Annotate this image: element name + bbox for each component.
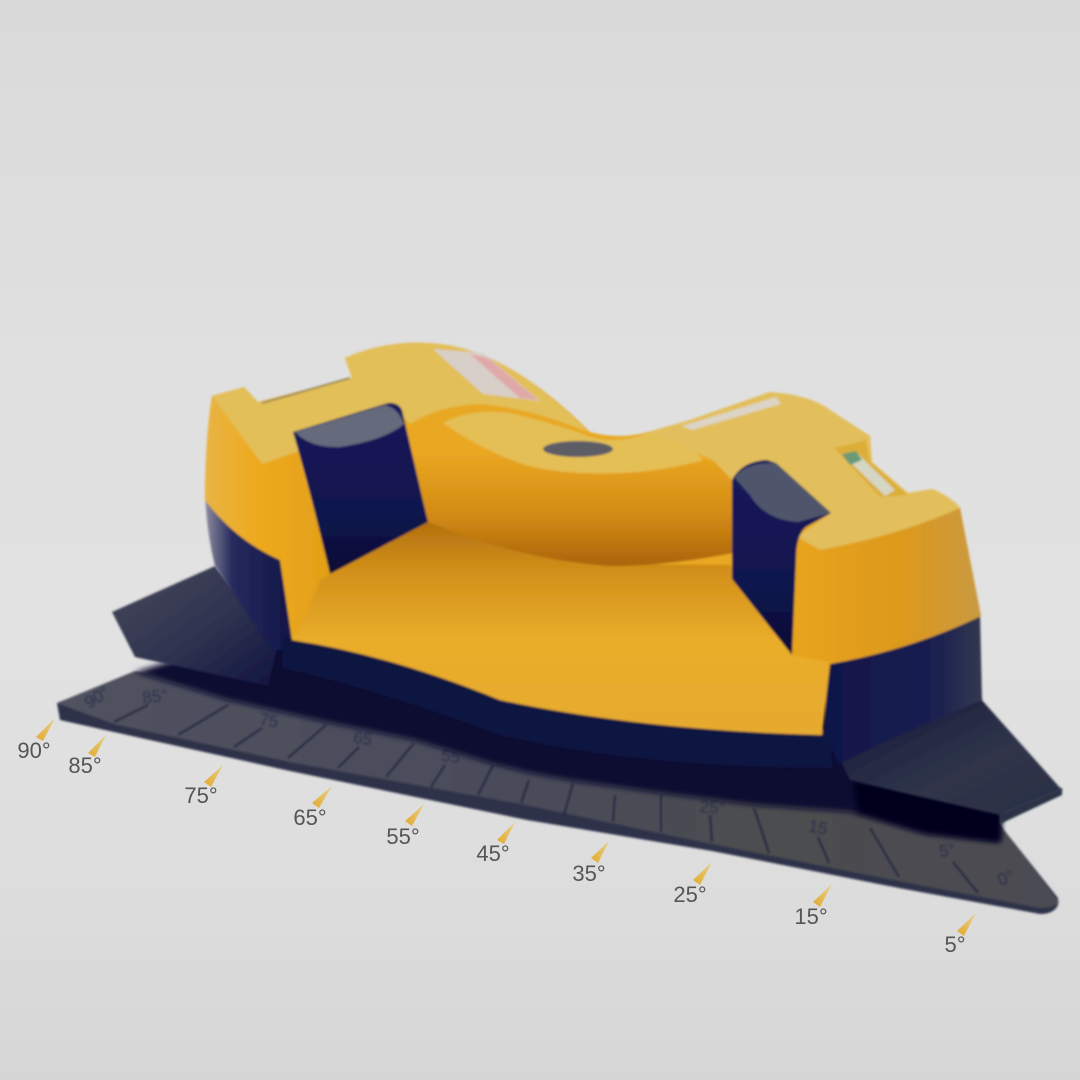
ruler tick marks xyxy=(114,705,978,893)
degree labels: 55° xyxy=(386,824,420,849)
ruler printed degree numbers xyxy=(81,682,1017,890)
right top surface xyxy=(648,392,960,550)
ruler side edge xyxy=(57,672,1058,914)
ruler shadow from body xyxy=(135,640,1002,842)
degree labels: 25° xyxy=(673,882,707,907)
ruler printed degree numbers: 15 xyxy=(807,817,829,839)
top surface left xyxy=(212,343,588,464)
degree labels: 5° xyxy=(944,932,966,957)
sight hole xyxy=(543,441,613,457)
level vial xyxy=(834,440,908,497)
degree labels: 45° xyxy=(476,841,510,866)
left navy pad xyxy=(293,403,428,574)
right navy housing xyxy=(826,614,982,764)
right foot xyxy=(836,698,1062,815)
black shadow below right foot xyxy=(852,780,1002,842)
right navy pad xyxy=(732,460,831,655)
ruler printed degree numbers: 25° xyxy=(699,797,726,818)
degree labels: 35° xyxy=(572,861,606,886)
degree labels: 90° xyxy=(17,738,51,763)
ruler printed degree numbers: 55 xyxy=(440,746,461,767)
left navy lower housing xyxy=(205,490,296,650)
ruler face xyxy=(57,671,1059,908)
degree labels xyxy=(17,738,966,957)
ruler printed degree numbers: 0° xyxy=(995,866,1017,890)
yellow left block xyxy=(205,396,332,640)
arch top surface xyxy=(443,412,703,473)
sticker right xyxy=(682,397,781,430)
warning sticker left xyxy=(433,349,540,401)
left notch slot xyxy=(262,378,350,403)
ruler printed degree numbers: 85° xyxy=(141,685,169,708)
ruler plate xyxy=(57,671,1059,914)
degree labels: 65° xyxy=(293,805,327,830)
right foot edge xyxy=(1000,788,1062,824)
spike pointers xyxy=(36,718,976,936)
left foot xyxy=(112,566,278,686)
degree labels: 85° xyxy=(68,753,102,778)
right yellow block xyxy=(792,508,981,663)
ruler printed degree numbers: 65 xyxy=(352,728,373,749)
right pad highlight xyxy=(735,463,831,522)
ruler printed degree numbers: 5° xyxy=(938,840,957,861)
ruler printed degree numbers: 75 xyxy=(258,710,280,732)
arch front xyxy=(405,419,740,566)
yellow silhouette xyxy=(205,343,981,735)
degree labels: 15° xyxy=(794,904,828,929)
yellow floor xyxy=(292,520,828,735)
degree labels: 75° xyxy=(184,783,218,808)
ruler printed degree numbers: 90° xyxy=(81,682,113,712)
left pad highlight xyxy=(295,405,404,447)
laser body xyxy=(205,343,982,768)
centre navy underside xyxy=(282,636,832,768)
